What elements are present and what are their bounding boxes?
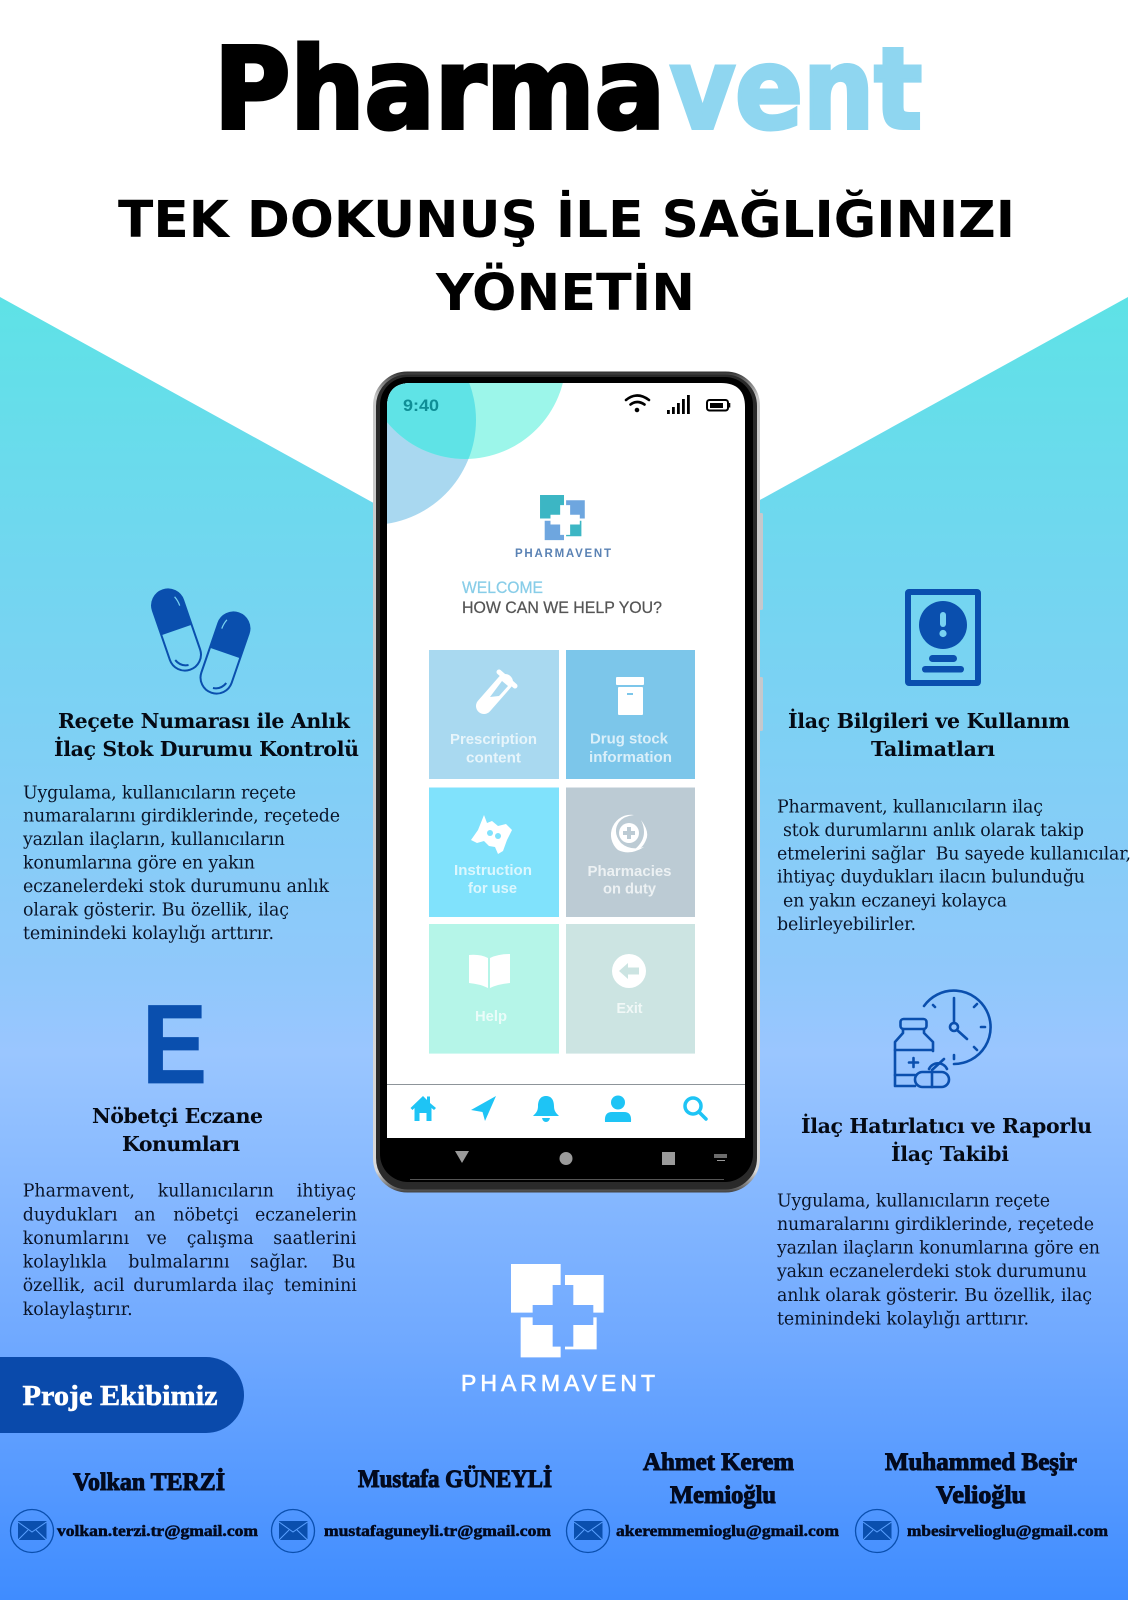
body text: Pharmavent, [23,1182,135,1202]
team member: Ahmet Kerem Memioglu: Ahmet Kerem [643,1449,794,1476]
body text: anlık olarak gösterir. Bu özellik, ilaç [777,1286,1092,1306]
body text: duydukları [23,1206,118,1226]
body text: belirleyebilirler. [777,915,916,935]
team member: Ahmet Kerem Memioglu [566,1449,840,1552]
tile: exit: Exit [616,1000,642,1017]
tile: drug stock information: Drug stock [590,730,669,748]
heading: İlaç Stok Durumu Kontrolü [54,737,359,761]
status bar time: 9:40 [403,396,439,415]
tile: drug stock information: information [589,749,672,766]
phone app logo: PHARMAVENT [515,548,611,560]
tile: exit [566,924,695,1054]
team member: Mustafa Guneyli [272,1465,552,1552]
body text: Uygulama, kullanıcıların reçete [777,1192,1050,1212]
white Pharmavent logo [461,1264,655,1396]
side buttons [759,513,763,731]
heading: slogan [118,190,1015,322]
icon: letter E: E [142,982,207,1107]
title: Pharmavent wordmark [214,25,922,155]
title: Pharmavent wordmark: Pharma [214,25,665,155]
icon: capsules [148,585,254,698]
body text: çalışma [187,1229,254,1249]
body text: ihtiyaç duydukları ilacın bulunduğu [777,868,1085,888]
team member: Muhammed Besir Velioglu [856,1449,1109,1552]
body text: durumlarda [133,1276,237,1296]
team member: Mustafa Guneyli: Mustafa GÜNEYLİ [358,1465,552,1493]
icon: user [605,1096,631,1122]
body text: özellik, [23,1276,85,1296]
white Pharmavent logo: PHARMAVENT [461,1370,655,1396]
android navigation buttons [455,1151,727,1165]
icon: email [566,1510,610,1552]
icon: email [272,1510,314,1552]
body text: yazılan ilaçların, kullanıcıların [22,830,285,850]
team member: Ahmet Kerem Memioglu: Memioğlu [670,1482,776,1509]
team member: Muhammed Besir Velioglu: mbesirvelioglu@gmail.com [907,1523,1109,1540]
screen [387,383,745,1138]
body text: konumlarına göre en yakın [23,854,255,874]
body text [23,1182,357,1320]
body text [777,798,1131,935]
body text: Pharmavent, kullanıcıların ilaç [777,798,1043,818]
icon: search [685,1098,706,1119]
team heading pill: Proje Ekibimiz [22,1380,218,1412]
team member: Mustafa Guneyli: mustafaguneyli.tr@gmail.com [324,1523,552,1540]
icon: storage box [616,677,644,715]
bottom nav divider [387,1084,745,1085]
team member: Muhammed Besir Velioglu: Velioğlu [936,1482,1026,1509]
welcome text: HOW CAN WE HELP YOU? [462,599,662,617]
body text: teminindeki kolaylığı arttırır. [23,924,274,944]
phone app logo [515,495,611,560]
body text: stok durumlarını anlık olarak takip [783,821,1084,841]
body text: yakın eczanelerdeki stok durumunu [776,1262,1087,1282]
heading: İlaç Hatırlatıcı ve Raporlu [801,1114,1092,1138]
body text: en yakın eczaneyi kolayca [783,892,1007,912]
body text [776,1192,1100,1330]
heading: Reçete Numarası ile Anlık [58,709,351,733]
tile: prescription content: Prescription [450,731,537,748]
phone mockup [373,372,763,1192]
panel: drug information [777,592,1131,935]
body text: an [134,1206,156,1226]
heading: slogan: YÖNETİN [435,263,695,322]
phone body [374,373,758,1191]
body text: nöbetçi [173,1206,239,1226]
body text: eczanelerdeki stok durumunu anlık [23,877,329,897]
body text: kolaylıkla [23,1253,107,1273]
body text [22,784,340,944]
tile: help: Help [475,1008,507,1025]
icon: email [10,1510,54,1552]
body text: olarak gösterir. Bu özellik, ilaç [23,901,289,921]
tile: drug stock information [566,650,695,779]
body text: ihtiyaç [297,1182,356,1202]
body text: sağlar. [250,1253,308,1273]
welcome text [462,579,662,617]
icon: open book [469,954,510,988]
icon: email [856,1510,898,1552]
panel: reminder and tracking [776,991,1100,1330]
tile: prescription content [429,650,559,779]
body text: etmelerini sağlar Bu sayede kullanıcılar, [777,844,1131,864]
body text: Uygulama, kullanıcıların reçete [23,784,296,804]
icon: wifi [626,396,649,412]
icon: bell [533,1096,559,1122]
heading [788,709,1070,761]
heading [801,1114,1092,1166]
body text: yazılan ilaçların konumlarına göre en [776,1238,1100,1258]
body text: kolaylaştırır. [23,1300,133,1320]
body text: kullanıcıların [158,1182,274,1202]
body text: ve [146,1229,167,1249]
icon: signing hands [471,815,512,854]
team member: Muhammed Besir Velioglu: Muhammed Beşir [885,1449,1077,1476]
heading: Konumları [122,1132,240,1156]
body text: bulmalarını [128,1253,230,1273]
icon: signal [667,395,690,414]
title: Pharmavent wordmark: vent [670,25,922,155]
team member: Volkan Terzi [10,1468,259,1552]
tile: prescription content: content [466,750,521,766]
icon: exit arrow [612,954,646,988]
icon: test tube [484,672,515,706]
icon: battery [707,400,730,410]
heading: İlaç Bilgileri ve Kullanım [788,709,1070,733]
heading: Talimatları [871,737,995,761]
body text: teminini [284,1276,357,1296]
icon: pharmacy emblem [611,815,647,852]
icon: info card [908,592,978,683]
tile: pharmacies on duty: on duty [603,880,657,898]
heading: slogan: TEK DOKUNUŞ İLE SAĞLIĞINIZI [118,190,1015,249]
welcome text: WELCOME [462,579,543,597]
heading: Nöbetçi Eczane [92,1104,263,1128]
team member: Ahmet Kerem Memioglu: akeremmemioglu@gmail.com [616,1523,840,1540]
panel: prescription stock control [22,585,359,944]
body text: numaralarını girdiklerinde, reçetede [777,1215,1094,1235]
body text: eczanelerin [255,1206,357,1226]
tile: instruction for use: for use [468,880,517,897]
team heading pill [0,1357,244,1433]
tile: instruction for use [429,788,559,917]
team member: Volkan Terzi: volkan.terzi.tr@gmail.com [57,1523,259,1540]
heading [92,1104,263,1156]
body text: teminindeki kolaylığı arttırır. [777,1310,1029,1330]
tile: pharmacies on duty [566,788,695,917]
tile: instruction for use: Instruction [454,862,532,879]
icon: clock and medicine bottle [895,991,991,1087]
body text: saatlerini [273,1229,357,1249]
body text: konumlarını [23,1229,130,1249]
tile: help [429,924,559,1054]
icon: navigation [471,1096,496,1121]
heading: İlaç Takibi [891,1142,1009,1166]
team member: Volkan Terzi: Volkan TERZİ [73,1468,225,1496]
body text: ilaç [243,1276,274,1296]
tile: pharmacies on duty: Pharmacies [588,863,672,880]
panel: pharmacies on duty [23,982,357,1320]
body text: acil [93,1276,125,1296]
icon: home [410,1096,436,1121]
body text: Bu [332,1253,356,1273]
body text: numaralarını girdiklerinde, reçetede [23,807,340,827]
heading [54,709,359,761]
